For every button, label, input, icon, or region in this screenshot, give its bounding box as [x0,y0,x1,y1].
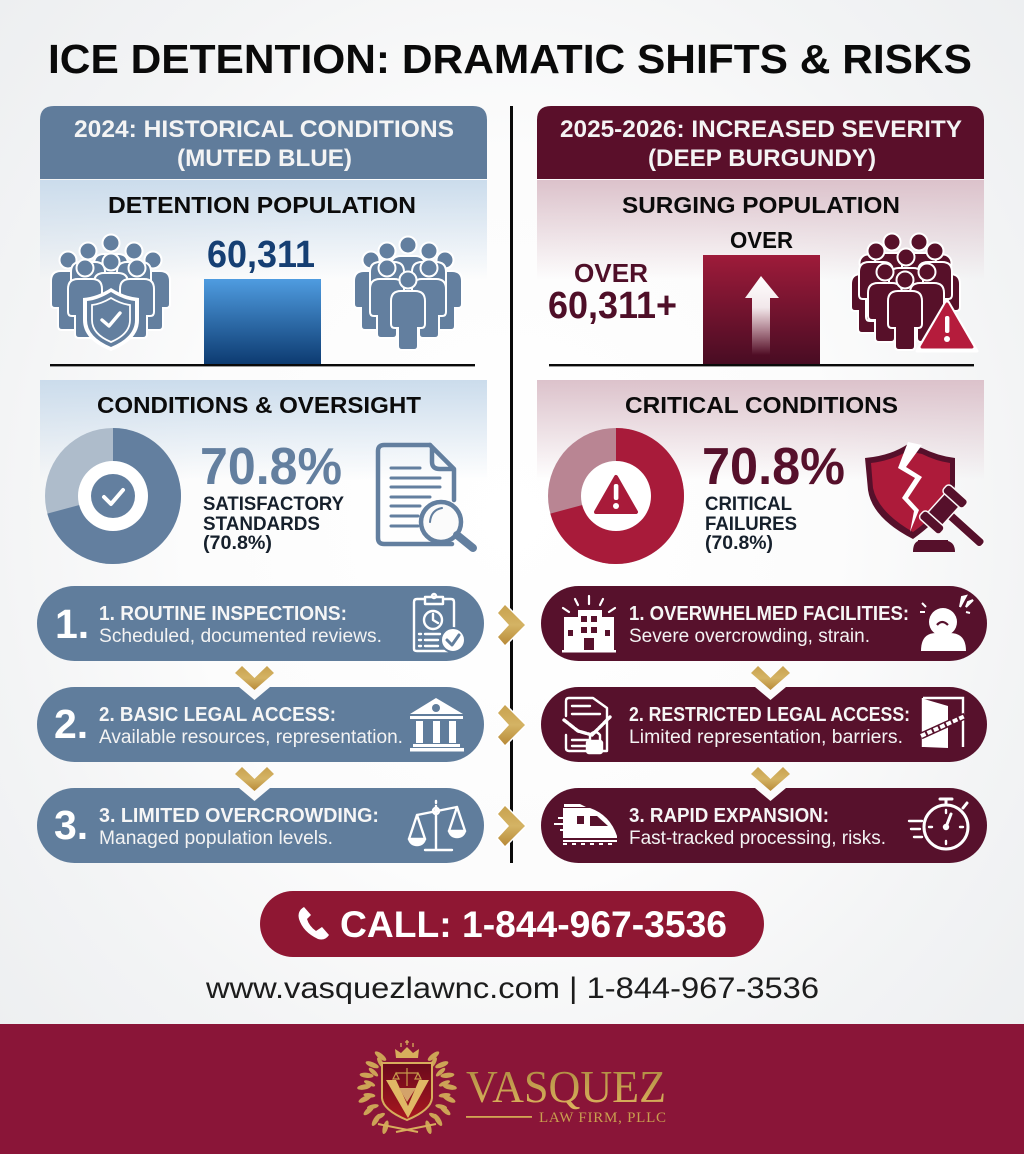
pill: routine inspections: Scheduled, documented reviews. [99,626,382,647]
label: critical failures: (70.8%) [705,533,773,554]
pill: routine inspections: 1. [55,601,89,647]
icon: chained document with padlock [564,698,610,753]
pill: basic legal access [37,687,484,762]
icon: chained door [921,698,965,748]
icon: scales of justice [409,801,465,850]
pill: basic legal access: 2. BASIC LEGAL ACCESS: [99,704,336,726]
arrows: left to right chevrons [498,605,525,846]
logo: wordmark: LAW FIRM, PLLC [539,1110,666,1126]
header: 2025-2026 [537,106,984,179]
label: satisfactory standards: SATISFACTORY [203,494,344,515]
icon: crowd with warning [851,234,977,351]
call to action button: CALL: 1-844-967-3536 [340,904,727,945]
section: conditions and oversight [40,380,487,564]
donut chart: 70.8% critical [548,428,684,564]
number: 60,311: 60,311 [207,234,315,276]
section: detention population [40,180,487,366]
panel: 2025-2026 increased severity [537,106,997,564]
footer band [0,1024,1024,1154]
pill: routine inspections: 1. ROUTINE INSPECTIONS: [99,603,347,625]
number: 70.8%: 70.8% [200,438,342,496]
header: 2025-2026: 2025-2026: INCREASED SEVERITY [560,116,962,143]
bar: surging with arrow [703,255,820,365]
icon: phone [299,907,329,940]
pill: basic legal access: 2. [54,701,88,747]
pill: overwhelmed facilities: 1. OVERWHELMED FACILITIES: [629,603,909,625]
number: over 60,311+: OVER [574,258,648,288]
heading: surging population: SURGING POPULATION [622,192,900,218]
header: 2024: (MUTED BLUE) [177,145,352,172]
icon: building with alert rays [562,596,616,652]
title: ICE DETENTION: DRAMATIC SHIFTS & RISKS [48,36,972,82]
number: 70.8%: 70.8% [702,438,845,496]
pill: restricted legal access: Limited representation, barriers. [629,727,903,748]
label: critical failures: FAILURES [705,514,797,535]
pill: basic legal access: Available resources, representation. [99,727,403,748]
label: satisfactory standards: (70.8%) [203,533,272,554]
label: satisfactory standards [203,494,344,554]
arrows: right column down chevrons [751,666,790,801]
heading: detention population: DETENTION POPULATION [108,192,416,218]
pill: rapid expansion: 3. RAPID EXPANSION: [629,805,829,827]
call to action button [260,891,764,957]
pill: rapid expansion: Fast-tracked processing, risks. [629,828,886,849]
label: critical failures: CRITICAL [705,494,792,515]
label: over: OVER [730,227,793,253]
pill: overwhelmed facilities: Severe overcrowding, strain. [629,626,870,647]
pill: limited overcrowding: 3. LIMITED OVERCROWDING: [99,805,379,827]
label: critical failures [705,494,797,554]
pill: limited overcrowding: Managed population levels. [99,828,333,849]
pill: rapid expansion [541,788,987,863]
icon: document and magnifier [378,445,473,548]
heading: conditions and oversight: CONDITIONS & OVERSIGHT [97,392,421,418]
number: over 60,311+: 60,311+ [548,285,677,327]
heading: critical conditions: CRITICAL CONDITIONS [625,392,898,418]
icon: stopwatch [909,799,968,849]
section: critical conditions [537,380,997,564]
header: 2024: 2024: HISTORICAL CONDITIONS [74,116,454,143]
header: 2024 [40,106,487,179]
pill: restricted legal access [541,687,987,762]
header: 2025-2026: (DEEP BURGUNDY) [648,145,876,172]
pill: routine inspections [37,586,484,661]
panel: 2024 historical conditions [40,106,487,564]
number: over 60,311+ [548,258,677,327]
bar: 60,311 [204,279,321,365]
icon: crowd [354,236,462,350]
icon: crowd with shield [51,234,170,351]
contact line: www.vasquezlawnc.com | 1-844-967-3536 [205,972,819,1005]
logo: crest [357,1040,457,1135]
icon: broken shield and gavel [865,442,997,561]
arrows: left column down chevrons [235,666,274,801]
icon: speeding train [554,804,617,844]
center divider line [510,106,513,863]
logo: wordmark: VASQUEZ [466,1061,666,1112]
icon: courthouse [410,698,464,752]
pill: restricted legal access: 2. RESTRICTED LEGAL ACCESS: [629,704,910,726]
pill: limited overcrowding [37,788,484,863]
section: surging population [537,180,984,366]
donut chart: 70.8% satisfactory [45,428,181,564]
pill: limited overcrowding: 3. [54,802,88,848]
icon: stressed person [920,596,973,651]
label: satisfactory standards: STANDARDS [203,514,320,535]
pill: overwhelmed facilities [541,586,987,661]
icon: clipboard [414,594,465,652]
